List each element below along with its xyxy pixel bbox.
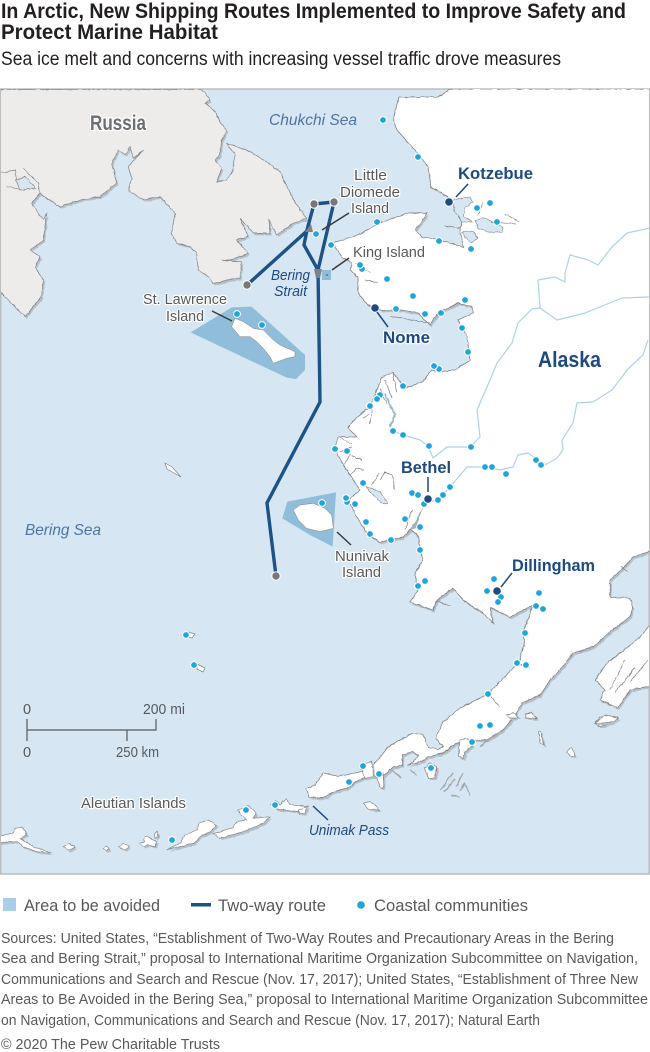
- title: Protect Marine Habitat: [1, 21, 218, 44]
- label: King Island: King Island: [353, 244, 425, 261]
- islands: Alaska Peninsula south side: [298, 713, 620, 816]
- subtitle: Sea ice melt and concerns with increasing vessel traffic drove measures: [1, 49, 561, 70]
- scale bar: 0: [23, 745, 31, 761]
- sources: Sources: United States, “Establishment of Two-Way Routes and Precautionary Areas in the Bering: [1, 930, 614, 947]
- title: [1, 0, 626, 44]
- city markers: [371, 198, 501, 595]
- label: Little Diomede Island: [340, 167, 400, 217]
- legend: coastal communities: Coastal communities: [374, 896, 528, 915]
- rivers: [393, 228, 650, 503]
- label: St. Lawrence Island: [142, 292, 228, 322]
- label: Nunivak Island: Island: [342, 564, 381, 581]
- area to be avoided: St. Lawrence Island: [191, 307, 305, 379]
- area to be avoided: Nunivak Island: [282, 492, 336, 547]
- label: Nome: Nome: [383, 328, 430, 347]
- sources: on Navigation, Communications and Search and Rescue (Nov. 17, 2017); Natural Earth: [1, 1012, 540, 1029]
- label: Little Diomede Island: Little: [354, 167, 387, 184]
- land: Russia: [0, 89, 308, 319]
- label: Kotzebue: Kotzebue: [458, 164, 533, 183]
- islands: Pribilofs and St. Matthew: [165, 463, 205, 672]
- label: Little Diomede Island: Island: [351, 200, 389, 217]
- label: St. Lawrence Island: Island: [166, 308, 204, 325]
- sources: Sea and Bering Strait,” proposal to International Maritime Organization Subcommittee on Navigation,: [1, 950, 638, 967]
- label: Little Diomede Island: Diomede: [340, 184, 400, 201]
- legend: area to be avoided: Area to be avoided: [24, 896, 160, 915]
- leader lines: [212, 184, 512, 820]
- islands: Aleutian chain west: [0, 798, 310, 855]
- label: St. Lawrence Island: St. Lawrence: [143, 291, 227, 308]
- label: Alaska: Alaska: [538, 347, 602, 372]
- label: Chukchi Sea: Chukchi Sea: [269, 112, 357, 129]
- map panel: [0, 89, 650, 874]
- label: Aleutian Islands: Aleutian Islands: [81, 795, 186, 812]
- scale bar: 0: [23, 702, 31, 718]
- scale bar: [23, 702, 185, 761]
- scale bar: 200 mi: [143, 702, 185, 718]
- precautionary areas: [305, 224, 322, 278]
- sources: [1, 930, 648, 1029]
- label: Bering Sea: Bering Sea: [25, 522, 101, 539]
- label: Unimak Pass: Unimak Pass: [309, 822, 389, 839]
- label: Russia: Russia: [90, 112, 146, 135]
- label: Bering Strait: Bering: [271, 267, 311, 284]
- label: Bering Strait: [271, 269, 310, 296]
- coastal community dots: [169, 117, 546, 843]
- route end points: [243, 198, 338, 580]
- area to be avoided: King Island: [322, 270, 331, 280]
- label: Bering Strait: Strait: [274, 283, 308, 300]
- legend: [3, 896, 528, 915]
- scale bar: 250 km: [116, 745, 159, 761]
- label: Bethel: Bethel: [401, 458, 451, 477]
- label: Dillingham: Dillingham: [512, 556, 595, 575]
- label: Nunivak Island: Nunivak: [335, 548, 389, 565]
- land: Alaska mainland: [306, 89, 650, 800]
- legend: two-way route: Two-way route: [218, 896, 326, 915]
- two-way route: [247, 202, 334, 576]
- label: Nunivak Island: [335, 548, 389, 581]
